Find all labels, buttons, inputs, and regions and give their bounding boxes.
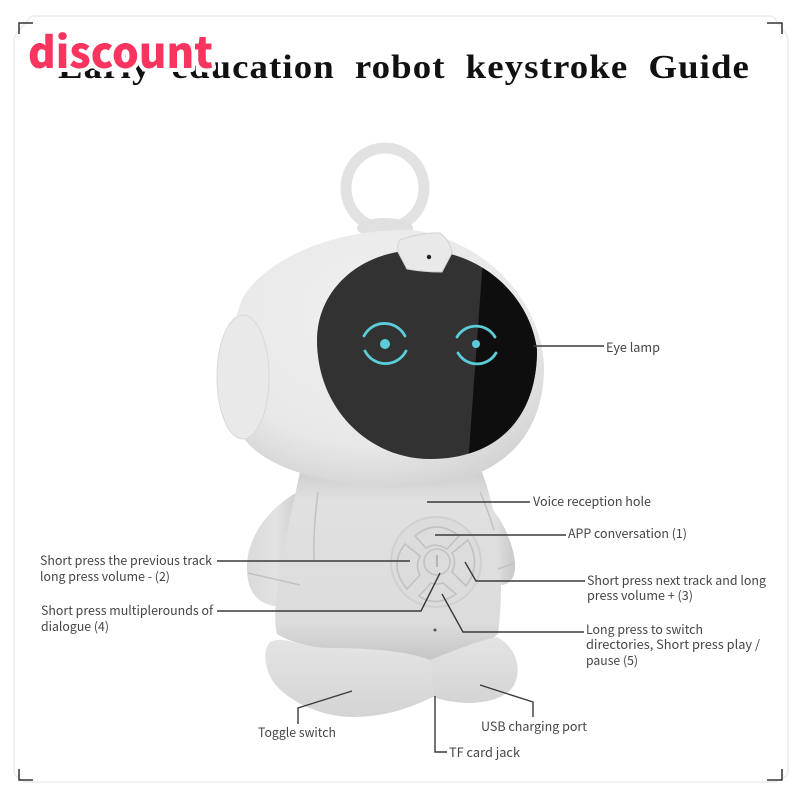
- microphone dot: [434, 628, 436, 632]
- label: next track: press volume + (3): [587, 585, 693, 604]
- label: previous track: [40, 550, 212, 585]
- button pad: [391, 517, 481, 607]
- icon: right eye: [457, 326, 496, 364]
- robot face screen: [317, 252, 537, 459]
- robot ear: [217, 315, 269, 439]
- label: app conversation: APP conversation (1): [568, 523, 687, 542]
- label: next track: [587, 570, 766, 604]
- label: toggle switch: Toggle switch: [258, 722, 336, 741]
- icon: left eye: [364, 323, 406, 364]
- label: switch directories: Long press to switch: [586, 619, 703, 638]
- robot left foot: [265, 640, 433, 717]
- discount badge: discount: [28, 19, 213, 81]
- robot torso: [275, 472, 501, 662]
- label: multiple rounds of dialogue: Short press multiplerounds of: [41, 600, 214, 619]
- label: multiple rounds of dialogue: [41, 600, 214, 635]
- robot left arm: [247, 488, 305, 607]
- label: eye lamp: Eye lamp: [606, 337, 660, 356]
- label: switch directories: pause (5): [586, 650, 638, 669]
- robot illustration: [217, 148, 545, 717]
- label: previous track: long press volume - (2): [40, 566, 170, 585]
- label: next track: Short press next track and long: [587, 570, 766, 589]
- label: switch directories: [586, 619, 760, 669]
- label: switch directories: directories, Short press play /: [586, 634, 760, 653]
- arm seams: [248, 492, 515, 585]
- callout lines: [217, 346, 604, 752]
- title: Early education robot keystroke Guide: [58, 49, 750, 86]
- label: previous track: Short press the previous track: [40, 550, 212, 569]
- label: voice reception hole: Voice reception hole: [533, 491, 651, 510]
- robot head: [230, 230, 544, 487]
- ring base: [357, 218, 413, 238]
- robot right arm: [470, 487, 515, 585]
- camera bump: [398, 233, 452, 272]
- label: multiple rounds of dialogue: dialogue (4): [41, 616, 109, 635]
- robot right foot: [430, 637, 518, 703]
- icon: hanging ring: [346, 148, 424, 228]
- label: USB charging port: USB charging port: [481, 716, 587, 735]
- label: TF card jack: TF card jack: [449, 742, 520, 761]
